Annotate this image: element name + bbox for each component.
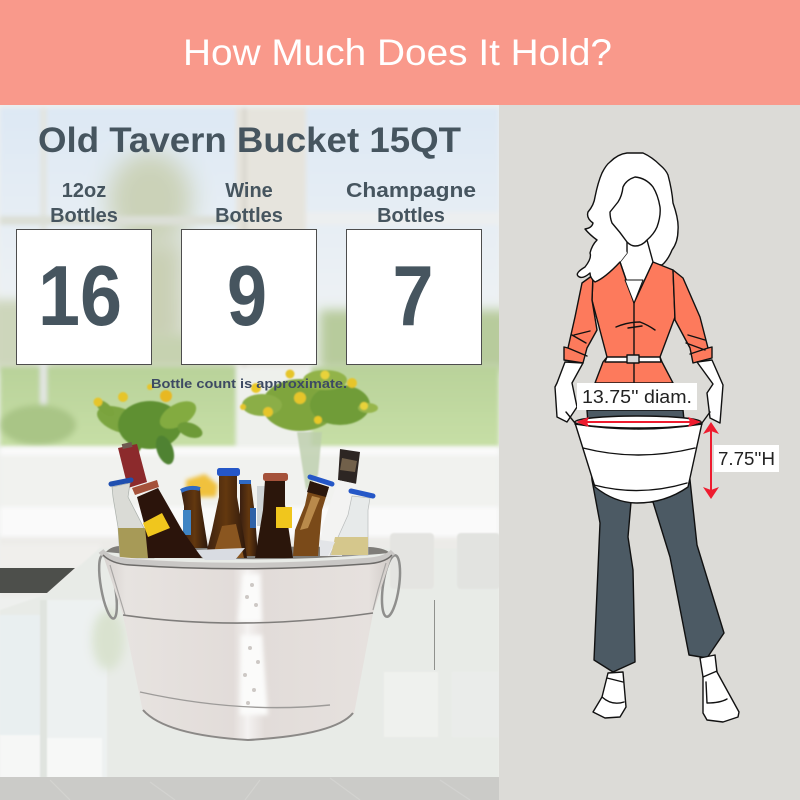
left hand — [555, 362, 583, 422]
dark sink gap — [0, 568, 75, 593]
bottle: clear left — [111, 480, 154, 558]
belt — [605, 357, 661, 362]
heading: product name: Old Tavern Bucket 15QT — [38, 121, 461, 160]
callout: height: 7.75''H — [718, 449, 775, 469]
label: Bottles — [215, 205, 283, 227]
column: champagne bottles — [346, 180, 482, 364]
number card — [16, 230, 152, 364]
arrow: height — [703, 422, 719, 499]
lower band — [140, 692, 330, 708]
trousers — [587, 410, 724, 672]
label: Champagne — [346, 180, 476, 202]
shoe left — [593, 672, 626, 718]
background: blurred kitchen photo — [0, 105, 510, 800]
side handle plate — [110, 563, 386, 615]
column: wine bottles — [182, 180, 316, 364]
upper band — [123, 613, 373, 623]
number: 7 — [392, 249, 434, 344]
title: How Much Does It Hold? — [183, 32, 612, 73]
label: Bottles — [50, 205, 118, 227]
number card — [346, 230, 482, 364]
background: right grey panel — [499, 105, 800, 800]
bottle: amber centre — [205, 468, 247, 558]
bottle: red-capped wine — [118, 442, 147, 488]
blouse placket — [616, 303, 655, 383]
shoe right — [700, 655, 739, 722]
callout: diameter: 13.75'' diam. — [582, 387, 692, 407]
note: approximate count: Bottle count is approximate. — [151, 376, 347, 391]
number card — [182, 230, 316, 364]
bottle: clear right — [330, 491, 373, 555]
hair front lock fill — [577, 224, 627, 282]
bottles and ice — [106, 442, 390, 560]
label: Wine — [225, 180, 273, 202]
callout: height — [714, 445, 779, 472]
counter top — [40, 532, 499, 777]
ice — [195, 540, 335, 560]
back fruit — [186, 474, 218, 497]
header banner — [0, 0, 800, 105]
right sleeve — [673, 270, 712, 363]
bottle: back blue-label — [181, 488, 208, 548]
left sleeve — [564, 275, 597, 363]
right hand — [697, 360, 723, 423]
undershirt — [625, 280, 643, 303]
sill and wall — [0, 444, 499, 536]
belt buckle — [627, 355, 639, 363]
bucket inner shadow — [106, 546, 390, 559]
ring handle right — [379, 554, 403, 618]
left bouquet — [93, 384, 205, 467]
bottle: tilted amber — [293, 477, 332, 556]
label: Bottles — [377, 205, 445, 227]
bottle: amber with yellow label — [255, 473, 293, 558]
bucket body — [103, 555, 392, 740]
flower bouquets — [93, 370, 378, 490]
column: 12oz bottles — [16, 180, 152, 364]
figure: woman holding bucket — [555, 153, 739, 722]
bottle: back centre — [239, 482, 258, 556]
bucket rim — [101, 551, 393, 566]
arrow: diameter — [576, 417, 701, 427]
ring handle left — [96, 554, 120, 620]
label: 12oz — [62, 180, 106, 202]
number: 16 — [38, 249, 122, 344]
hammer dimples — [243, 583, 260, 705]
icon: hammered steel bucket — [96, 551, 403, 740]
bottle: clear back — [257, 486, 265, 526]
base rim — [143, 710, 353, 740]
callout: diameter — [577, 383, 697, 410]
blouse — [592, 262, 675, 383]
hair back — [585, 153, 678, 270]
bottle: dark tilted with yellow label — [132, 480, 202, 558]
neck — [620, 240, 653, 303]
face — [610, 177, 660, 246]
number: 9 — [227, 249, 267, 344]
bucket outline — [575, 423, 702, 503]
marble counter edge — [0, 777, 499, 800]
vase — [297, 432, 322, 490]
bottle: white champagne — [320, 449, 360, 556]
hair front lock outline — [577, 240, 620, 282]
right bouquet — [240, 370, 378, 431]
hammered highlight — [238, 574, 268, 715]
